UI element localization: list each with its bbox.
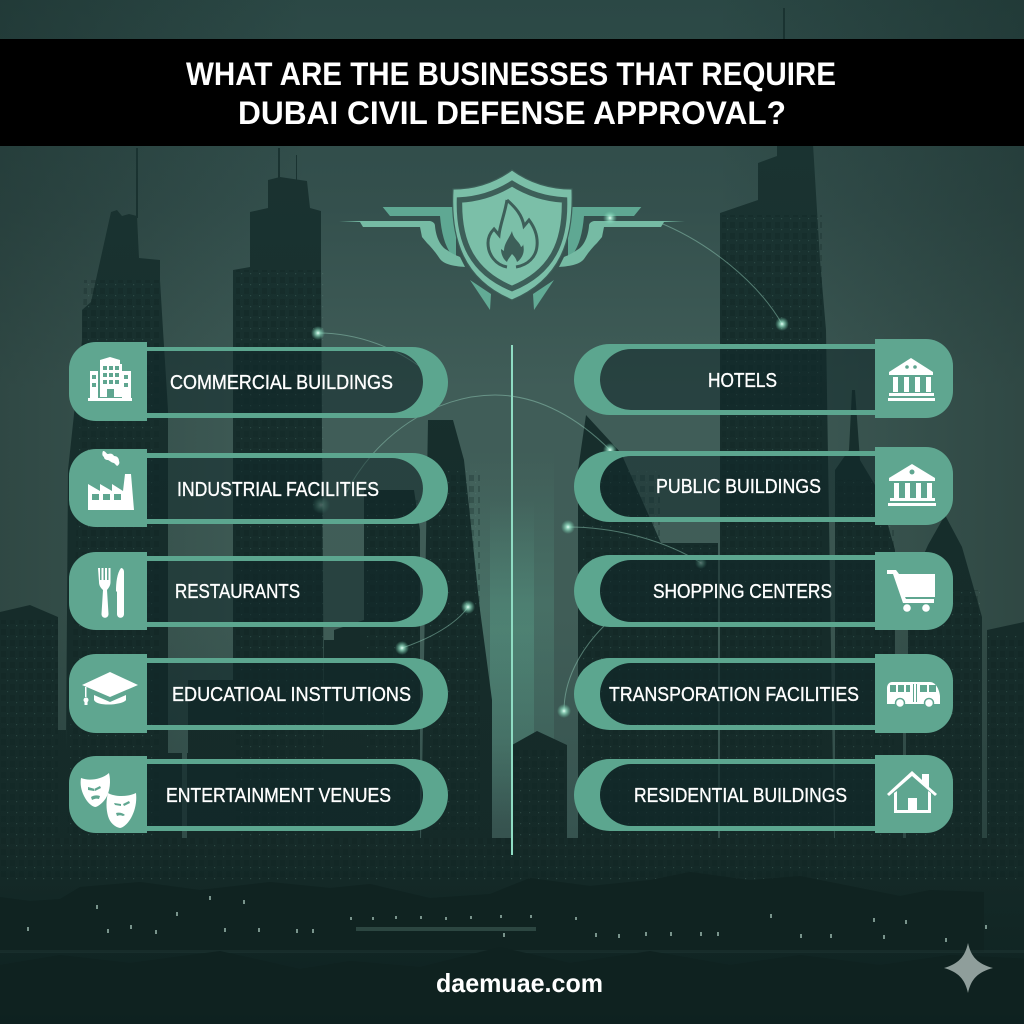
item: transportation facilities	[574, 654, 953, 733]
title banner	[0, 39, 1024, 146]
item: entertainment venues: ENTERTAINMENT VENUES	[166, 785, 391, 807]
item: commercial buildings: COMMERCIAL BUILDINGS	[170, 372, 393, 394]
item: shopping centers: SHOPPING CENTERS	[653, 581, 832, 603]
item: hotels: HOTELS	[708, 370, 777, 392]
icon: theatre masks	[81, 773, 136, 828]
footer: website: daemuae.com	[436, 968, 603, 998]
icon: bus	[887, 682, 940, 708]
item: residential buildings: RESIDENTIAL BUILDINGS	[634, 785, 847, 807]
background: window texture	[0, 215, 1024, 895]
title banner: WHAT ARE THE BUSINESSES THAT REQUIRE	[186, 56, 836, 92]
item: restaurants: RESTAURANTS	[175, 581, 300, 603]
item: shopping centers	[574, 552, 953, 630]
icon: four-point sparkle	[944, 943, 993, 993]
icon: office building	[88, 357, 132, 401]
icon: public building	[888, 464, 936, 506]
center divider line	[511, 345, 513, 855]
item: transportation facilities: TRANSPORATION FACILITIES	[609, 684, 859, 706]
emblem: shield with flame and wings	[339, 170, 685, 310]
item: entertainment venues	[69, 756, 448, 833]
icon: fork and knife	[98, 568, 124, 618]
icon: shopping cart	[887, 570, 935, 612]
item: educational institutions: EDUCATIOAL INSTTUTIONS	[172, 684, 411, 706]
title banner: DUBAI CIVIL DEFENSE APPROVAL?	[238, 95, 786, 131]
item: hotels	[574, 339, 953, 418]
item: residential buildings	[574, 755, 953, 833]
item: educational institutions	[69, 654, 448, 733]
icon: house	[887, 771, 937, 813]
item: industrial facilities: INDUSTRIAL FACILITIES	[177, 479, 379, 501]
left column of categories	[69, 342, 448, 833]
icon: graduation cap	[82, 672, 138, 705]
icon: columned bank	[888, 358, 935, 401]
right column of categories	[574, 339, 953, 833]
item: commercial buildings	[69, 342, 448, 421]
icon: factory with smoke	[88, 451, 134, 510]
item: public buildings	[574, 447, 953, 525]
background: ground, tree line and city lights	[0, 838, 1024, 1024]
item: industrial facilities	[69, 449, 448, 527]
center glow beam	[470, 450, 554, 830]
item: public buildings: PUBLIC BUILDINGS	[656, 476, 821, 498]
connector arcs and glowing nodes	[311, 222, 789, 718]
item: restaurants	[69, 552, 448, 630]
